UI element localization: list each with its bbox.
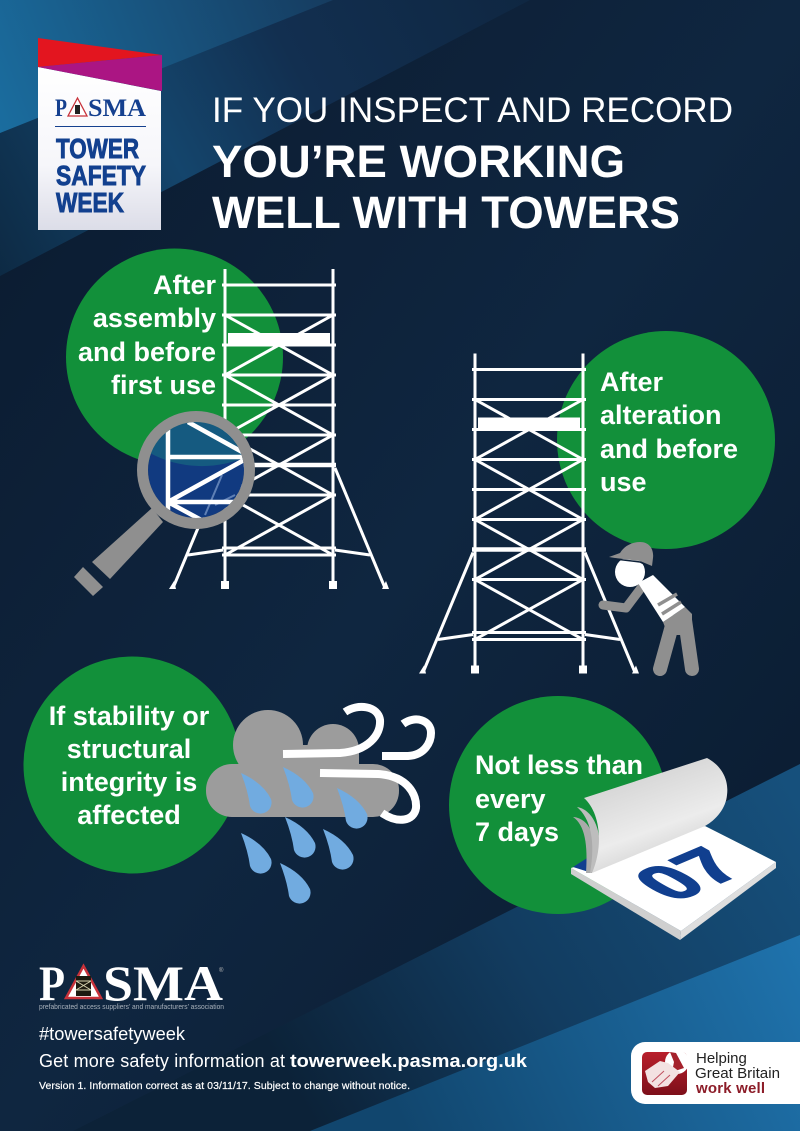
panel: stability affected: [24, 656, 431, 904]
text: after assembly: assembly: [93, 303, 216, 333]
logo: Tower Safety Week badge: SAFETY: [56, 160, 146, 191]
text: stability affected: affected: [77, 800, 181, 830]
icon: calendar: [571, 758, 776, 940]
HSE badge: Helping Great Britain work well: [631, 1042, 800, 1104]
icon: calendar: 07: [615, 838, 763, 911]
text: 7 days: 7 days: [475, 817, 559, 847]
text: after assembly: and before: [78, 337, 216, 367]
PASMA footer logo: prefabricated access suppliers’ and manufacturers’ association: [39, 1002, 224, 1011]
logo: Tower Safety Week badge: P: [55, 95, 67, 122]
text: after alteration: and before: [600, 434, 738, 464]
footer text: [39, 1024, 528, 1092]
HSE badge: Helping Great Britain work well: work well: [695, 1080, 765, 1097]
text: after alteration: After: [600, 367, 663, 397]
green circle: [557, 331, 775, 549]
text: 7 days: [475, 750, 643, 847]
panel: after assembly: [66, 248, 389, 596]
title: YOU’RE WORKING: [212, 136, 625, 187]
logo: Tower Safety Week badge: SMA: [88, 95, 146, 122]
text: stability affected: If stability or: [49, 701, 210, 731]
text: stability affected: [49, 701, 210, 830]
title: IF YOU INSPECT AND RECORD: [212, 91, 733, 130]
footer text: towerweek.pasma.org.uk: [290, 1050, 528, 1071]
footer text: #towersafetyweek: [39, 1024, 186, 1044]
scaffold tower: [169, 269, 389, 589]
panel: after alteration: [419, 331, 775, 674]
text: stability affected: integrity is: [61, 767, 197, 797]
title: [212, 91, 733, 238]
title: WELL WITH TOWERS: [212, 187, 680, 238]
scaffold tower: [419, 354, 639, 674]
panel: not less than 7 days: [449, 696, 776, 940]
text: 7 days: every: [475, 784, 546, 814]
logo: Tower Safety Week badge: WEEK: [56, 187, 124, 218]
text: stability affected: structural: [67, 734, 191, 764]
logo: Tower Safety Week badge: [38, 38, 162, 230]
text: after assembly: first use: [111, 370, 216, 400]
green circle: [449, 696, 667, 914]
HSE badge: Helping Great Britain work well: Great Britain: [695, 1065, 780, 1082]
icon: storm cloud: [206, 707, 431, 904]
PASMA footer logo: SMA: [103, 955, 223, 1011]
text: after alteration: alteration: [600, 400, 722, 430]
PASMA footer logo: [39, 955, 224, 1011]
green circle: [24, 656, 240, 874]
text: after alteration: use: [600, 467, 647, 497]
HSE badge: Helping Great Britain work well: Helping: [696, 1050, 747, 1067]
icon: worker: [603, 542, 692, 669]
footer text: Version 1. Information correct as at 03/11/17. Subject to change without notice.: [39, 1080, 410, 1092]
text: 7 days: Not less than: [475, 750, 643, 780]
icon: magnifying glass: [74, 410, 250, 596]
green circle: [66, 248, 283, 466]
text: after assembly: After: [153, 270, 216, 300]
PASMA footer logo: P: [39, 955, 65, 1011]
logo: Tower Safety Week badge: TOWER: [56, 133, 139, 164]
text: after assembly: [78, 270, 216, 400]
PASMA footer logo: ®: [219, 967, 224, 974]
text: after alteration: [600, 367, 738, 497]
footer text: Get more safety information at: [39, 1051, 285, 1071]
